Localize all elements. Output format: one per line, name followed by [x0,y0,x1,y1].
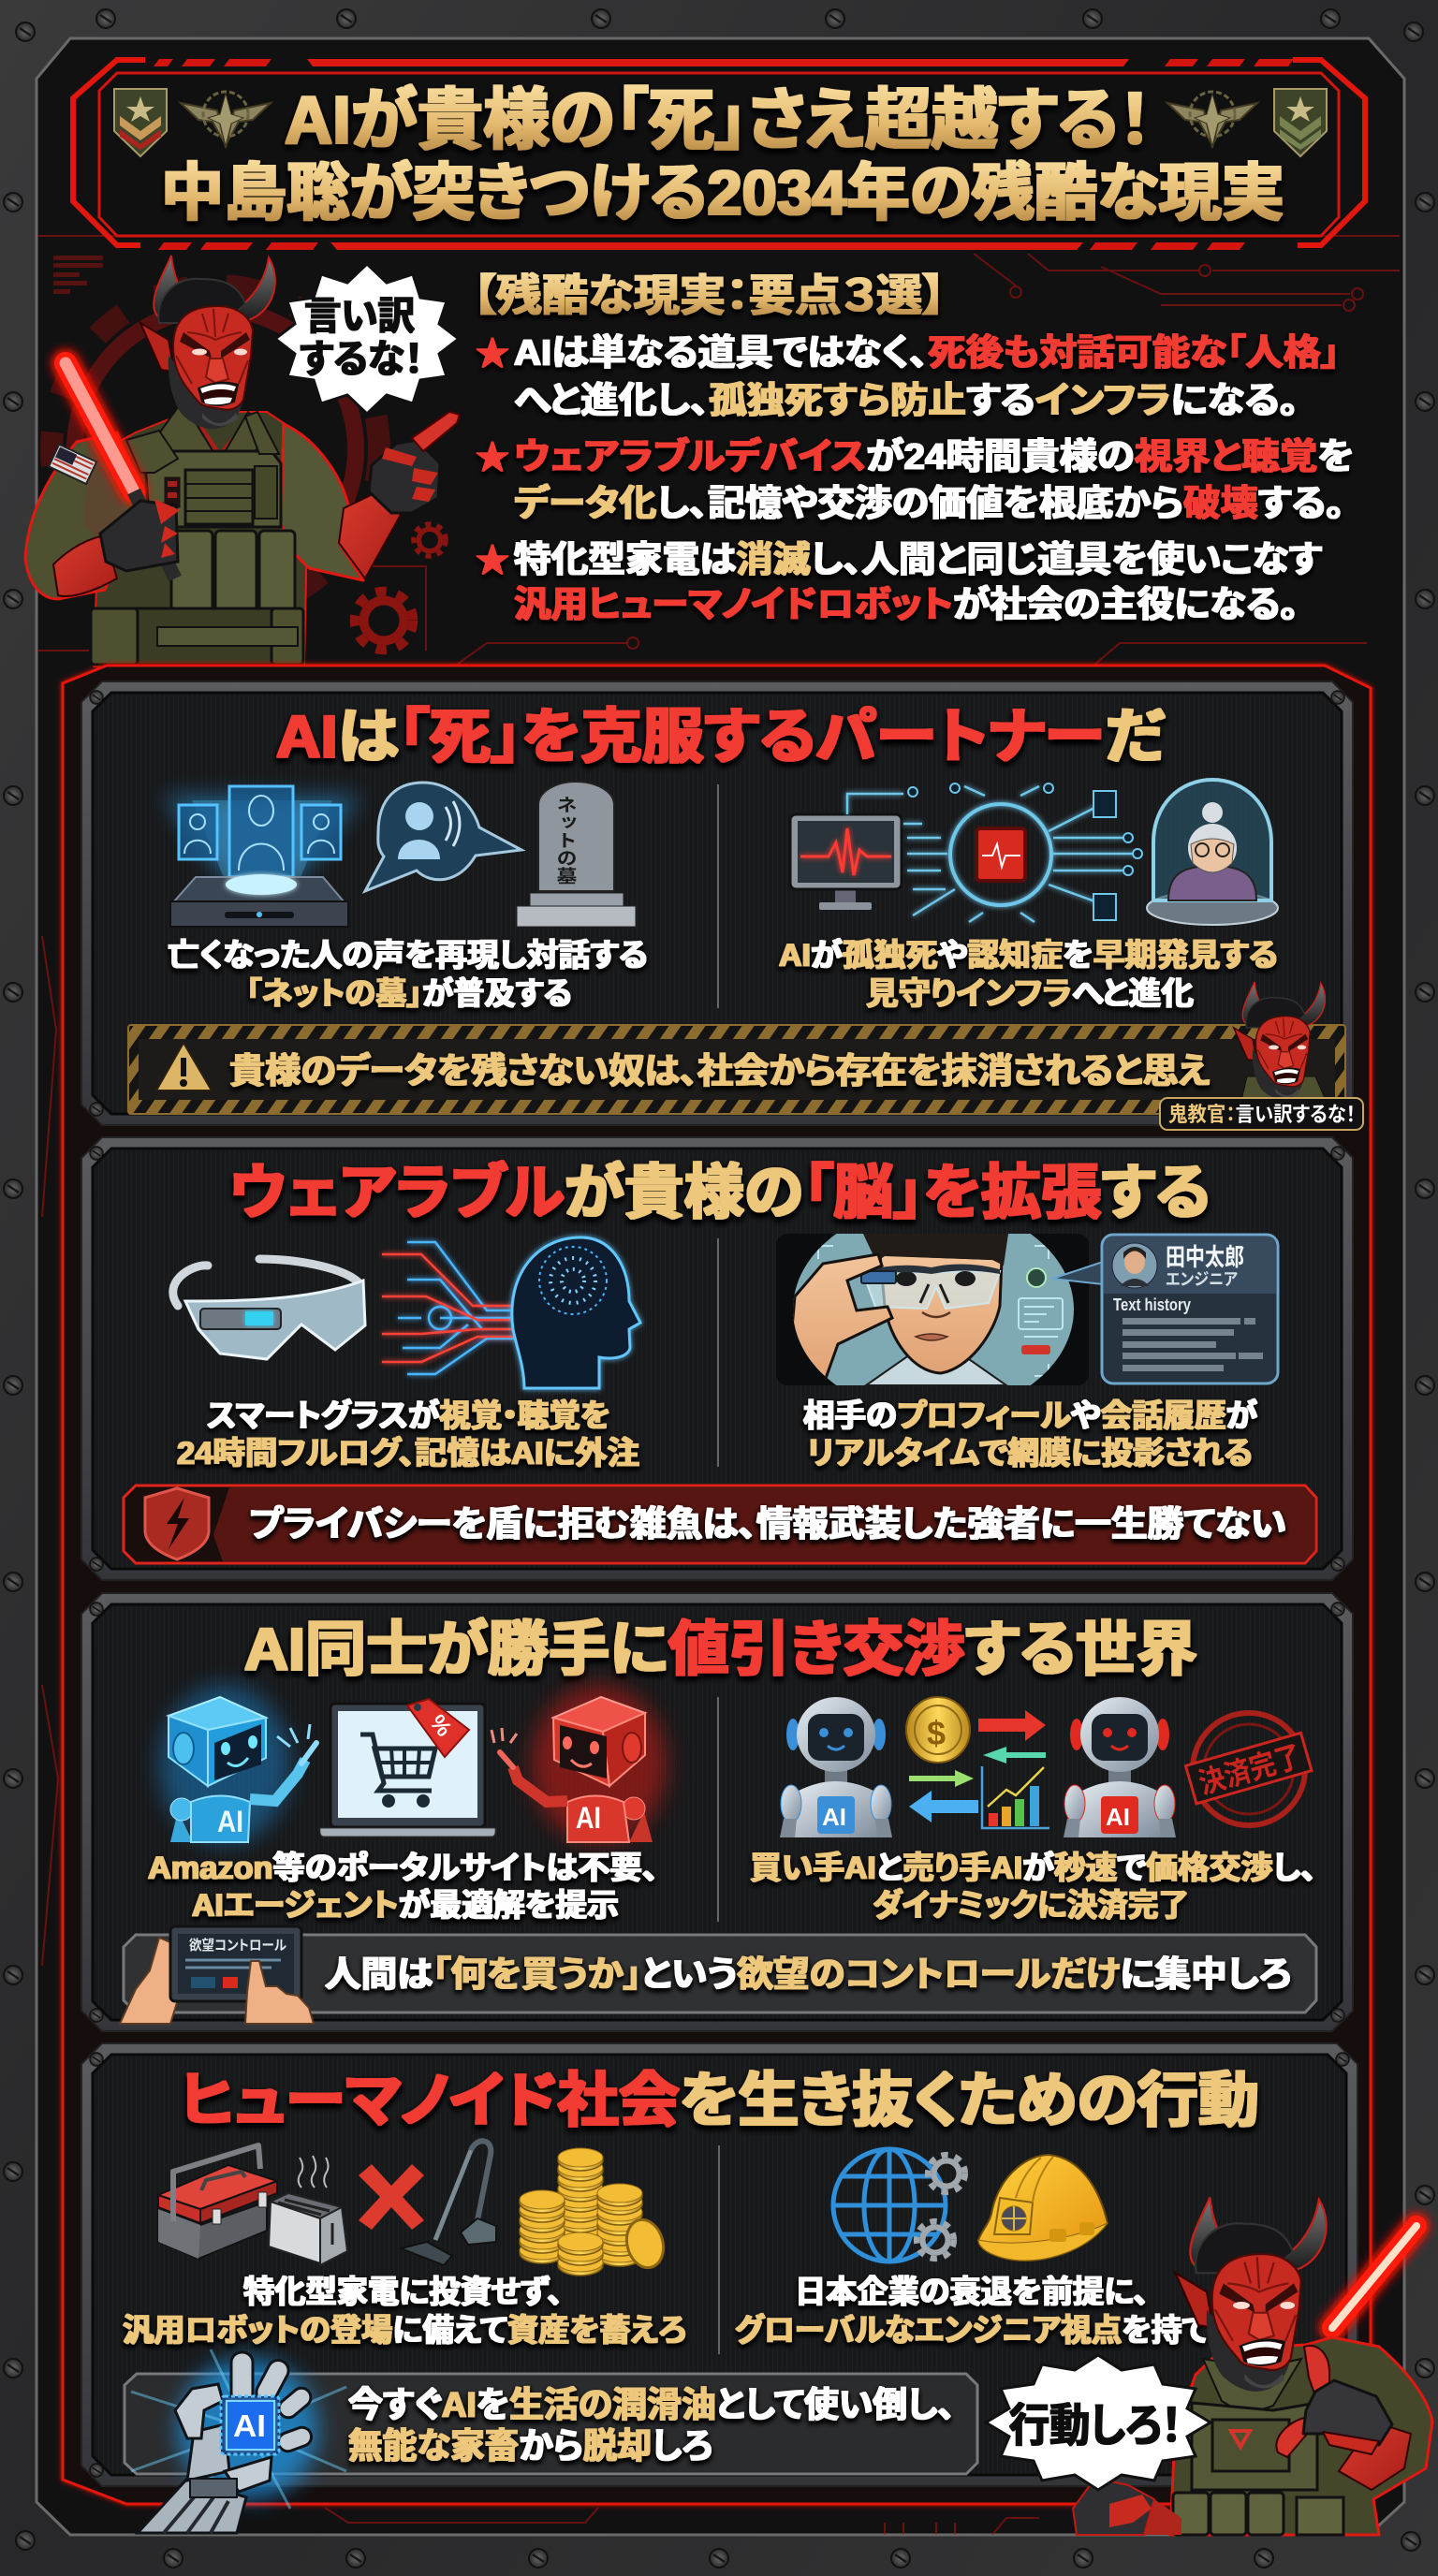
icon: brain head silhouette [512,1237,640,1388]
divider [717,784,719,1008]
icon: voice speech bubble [365,783,521,891]
face [880,1254,1002,1373]
callout: desire control [120,1926,1316,2024]
captions left and right: 亡くなった人の声を再現し対話する [168,938,648,973]
illustration: man with AR glasses [776,1234,1089,1385]
captions: Amazon等のポータルサイトは不要、 [148,1851,658,1886]
icon: laptop shopping cart with price tag [320,1699,495,1837]
speech burst: take action: 行動しろ！ [1009,2401,1181,2452]
summary bullets: 汎用ヒューマノイドロボットが社会の主役になる。 [514,585,1299,625]
profile card: 田中太郎 [1166,1243,1244,1271]
icon: negotiation arrows and chart [909,1710,1049,1828]
icon: toaster [269,2156,347,2265]
captions left and right: AIが孤独死や認知症を早期発見する [779,937,1278,973]
red outer frame around panels [63,666,1371,2504]
captions [177,1398,1257,1471]
icon: yellow hard hat [978,2155,1108,2261]
icon: laptop shopping cart with price tag: % [424,1710,457,1742]
callout: use AI as lubricant: 今すぐAIを生活の潤滑油として使い倒し、 [348,2386,955,2425]
icon: red seller robot [492,1685,667,1844]
captions left and right [168,937,1278,1012]
callout: privacy warning [124,1486,1316,1563]
summary bullets: AIは単なる道具ではなく、 死後も対話可能な「人格」 [514,333,1340,373]
glasses lens [863,1271,1000,1309]
pointing glove [369,412,460,513]
callout: use AI as lubricant [125,2374,977,2474]
panel 3: AI price negotiation [81,1593,1353,2031]
captions: 買い手AIと売り手AIが秒速で価格交渉し、 [750,1850,1316,1886]
icon: net grave tombstone: ネットの墓 [554,796,577,885]
icon: globe with gears [833,2149,965,2261]
icon: buyer robot: AI [822,1803,846,1831]
captions: 日本企業の衰退を前提に、 [795,2275,1149,2310]
captions: スマートグラスが視覚・聴覚を [207,1398,610,1434]
bottom demon instructor character [1073,2198,1432,2535]
summary bullets: 特化型家電は消滅し、人間と同じ道具を使いこなす [514,540,1322,580]
icon: blue buyer robot: AI [217,1805,243,1838]
robot hand holding AI chip: AI [233,2408,266,2443]
callout: hazard warning [128,1025,1345,1114]
summary bullets: ★ [476,334,509,373]
title: 中島聡が突きつける2034年の残酷な現実 [161,158,1284,228]
icon: red seller robot: AI [576,1801,601,1835]
summary heading: 【残酷な現実：要点３選】 [473,271,946,320]
speech burst: excuses: 言い訳 [304,294,415,338]
icon: net grave tombstone [517,782,636,927]
glowing red saber [66,363,175,578]
icon: hologram projector [164,786,360,927]
captions [148,1850,1316,1924]
divider [717,1697,719,1922]
icon: red cross [359,2164,424,2230]
panel 3 heading: AI同士が勝手に値引き交渉する世界 [244,1616,1197,1683]
callout: privacy warning: プライバシーを盾に拒む雑魚は、情報武装した強者に一生勝てない [249,1505,1286,1544]
icon: warning triangle [156,1043,212,1090]
icon: toolbox [158,2145,277,2259]
stamp: payment complete: 決済完了 [1195,1739,1305,1800]
callout: desire control: 人間は「何を買うか」という欲望のコントロールだけに集中しろ [325,1955,1291,1995]
icon: data circuit lines [382,1242,524,1374]
summary bullets: へと進化し、孤独死すら防止 するインフラになる。 [514,381,1299,421]
summary bullets: データ化し、記憶や交渉の価値を根底から 破壊する。 [514,483,1344,524]
captions: 汎用ロボットの登場に備えて資産を蓄えろ [123,2313,686,2349]
icon: smart glasses [173,1259,365,1359]
header banner [73,59,1365,250]
panel 2: wearables extend the brain [81,1137,1353,1580]
glowing saber [1332,2226,1416,2328]
robot hand holding AI chip [131,2349,346,2533]
lower fist [1073,2478,1181,2535]
top demon instructor character [25,256,460,666]
icon: buyer robot [780,1697,892,1837]
speech burst: take action [986,2355,1211,2490]
callout: use AI as lubricant: 無能な家畜から脱却しろ [348,2427,712,2466]
icon: gold dollar coin [906,1697,970,1763]
rank badges [114,89,1327,156]
callout: hazard warning: 貴様のデータを残さない奴は、社会から存在を抹消されると思え [229,1051,1211,1091]
fingers [175,2352,315,2454]
captions: 24時間フルログ、記憶はAIに外注 [177,1436,639,1471]
summary: three key points [473,271,1354,625]
torso and sleeves [25,412,363,666]
icon: blue buyer robot [159,1685,316,1844]
icon: elderly woman in glass dome [1147,780,1278,925]
profile card: エンジニア [1166,1270,1239,1289]
captions: ダイナミックに決済完了 [873,1887,1189,1924]
summary bullets: ★ [476,541,509,579]
profile card: Text history [1113,1295,1191,1314]
captions left and right: 「ネットの墓」が普及する [246,975,572,1012]
icon: vacuum cleaner [401,2141,496,2265]
icon: AI monitoring chip [847,783,1142,922]
icon: cracked shield [145,1488,209,1559]
summary bullets: ウェアラブルデバイス が24時間貴様の 視界と聴覚を [514,436,1354,477]
divider [717,1238,719,1467]
summary bullets: ★ [476,438,509,476]
captions left and right: 見守りインフラへと進化 [866,976,1194,1012]
forearm [138,2479,246,2533]
title [161,83,1284,228]
palm [187,2424,229,2481]
icon: tablet held in hands: 欲望コントロール [189,1938,286,1954]
panel 4 heading: ヒューマノイド社会を生き抜くための行動 [180,2067,1259,2134]
icon: gold dollar coin: $ [927,1714,946,1752]
captions: グローバルなエンジニア視点を持て [735,2313,1209,2349]
captions: 特化型家電に投資せず、 [243,2275,563,2310]
divider [718,2145,720,2354]
panel 4: actions for the humanoid society [81,2043,1357,2486]
badge: 鬼教官：言い訳するな！ [1168,1103,1356,1126]
summary bullets [476,333,1354,625]
icon: seller robot [1064,1697,1176,1837]
profile card [1052,1235,1278,1383]
shirt [866,1353,1006,1385]
icon: stacked gold coins [520,2148,668,2276]
title: AIが貴様の「死」さえ超越する！ [285,83,1152,158]
pointing fist [1276,2346,1392,2457]
icon: vital monitor [790,814,902,910]
panel 1 heading: AIは「死」を克服するパートナー だ [276,703,1165,770]
small demon portrait and badge [1160,982,1363,1130]
captions: AIエージェントが最適解を提示 [192,1887,619,1924]
stamp: payment complete [1185,1713,1312,1825]
speech burst: excuses [275,264,459,414]
HUD [818,1246,1063,1376]
captions: リアルタイムで網膜に投影される [807,1436,1253,1471]
captions [123,2275,1209,2349]
icon: seller robot: AI [1106,1803,1130,1831]
panel 1: AI overcomes death [81,681,1363,1130]
hand [791,1254,892,1385]
panel 2 heading: ウェアラブルが貴様の「脳」を拡張する [229,1159,1211,1226]
icon: tablet held in hands [120,1926,314,2024]
captions: 相手のプロフィールや会話履歴が [803,1398,1257,1434]
speech burst: excuses: するな！ [300,337,423,381]
